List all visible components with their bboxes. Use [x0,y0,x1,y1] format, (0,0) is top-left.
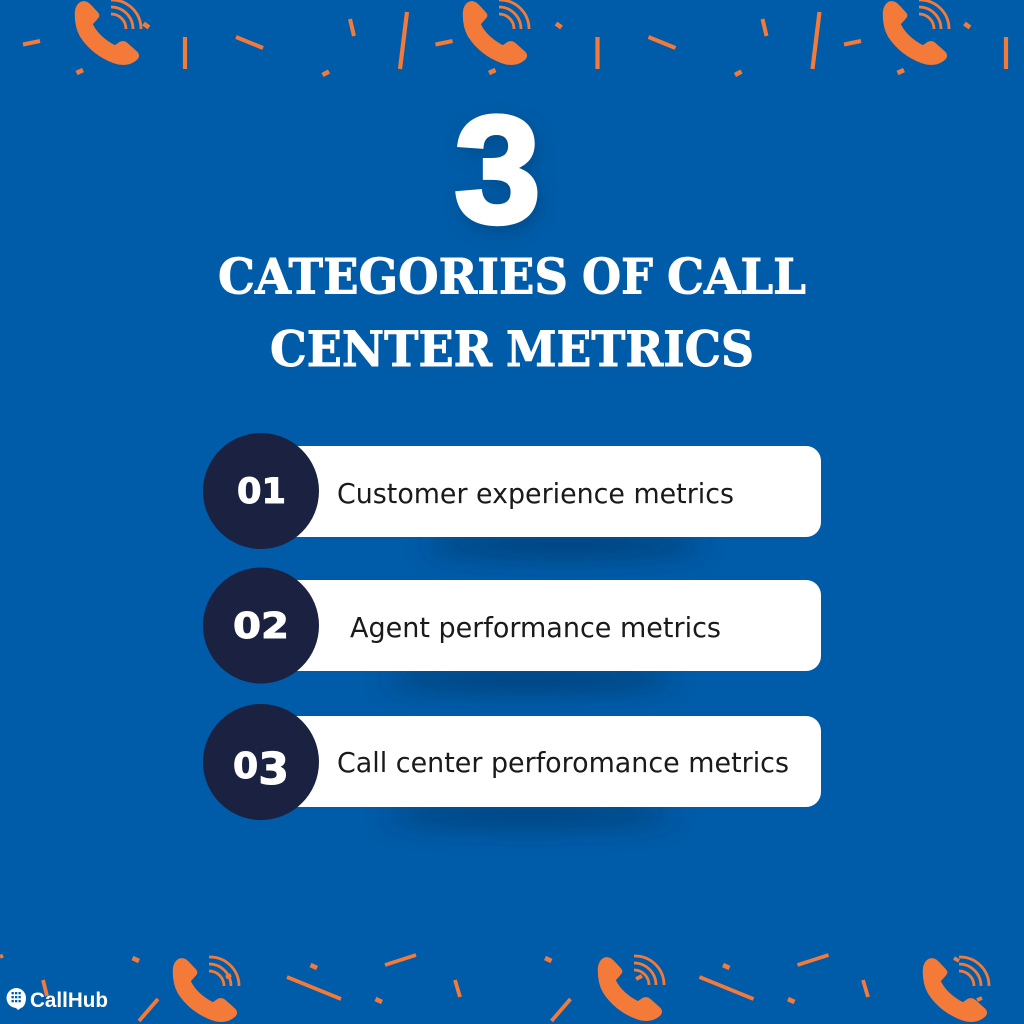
list item 3: 3 [258,744,289,795]
top decorative band: phones and ticks [23,0,1024,75]
big number 3: 3 [458,91,543,261]
list item 2 [203,568,821,692]
list item 1: Customer experience metrics [337,477,734,510]
list item 3: 0 [233,746,258,787]
list item 3: Call center perforomance metrics [337,746,789,779]
CallHub logo: CallHub [30,989,108,1012]
title: CALL [667,248,806,306]
title [218,248,806,378]
title: METRICS [506,320,754,378]
list item 3 [203,704,821,827]
list item 1: 01 [237,472,286,512]
big number 3: 3 [454,85,540,255]
title: CENTER [270,320,493,378]
title: CATEGORIES [218,248,568,306]
list item 1 [203,433,821,558]
list item 2: Agent performance metrics [350,611,721,644]
list item 2: 02 [233,606,289,647]
bottom decorative band: phones and ticks [0,955,989,1021]
title: OF [582,248,653,306]
